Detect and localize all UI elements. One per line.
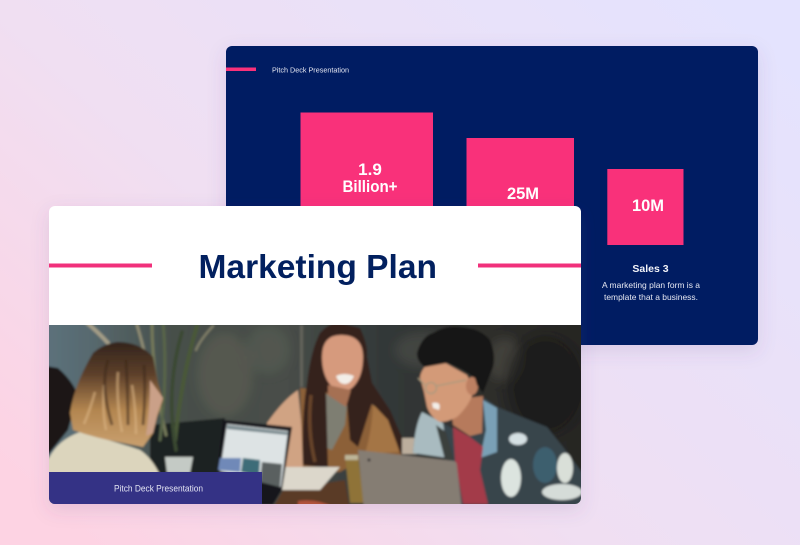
right accent bar [478, 264, 581, 268]
stat block: 10M [607, 169, 684, 245]
woman center: face and neck [322, 335, 363, 392]
glass [165, 457, 193, 473]
back slide accent bar [226, 68, 256, 71]
man: glasses [418, 378, 466, 394]
stat block: 10M: 10M [632, 197, 664, 215]
banner: pitch deck presentation [49, 472, 262, 504]
stat block: 1.9 Billion+: 1.9 [358, 160, 382, 179]
small laptop [217, 420, 292, 505]
back slide label: Pitch Deck Presentation [272, 66, 349, 74]
wall cushion [402, 438, 417, 454]
title: Marketing Plan [198, 248, 437, 285]
beer glass [345, 455, 364, 503]
stat block: 1.9 Billion+: Billion+ [342, 178, 398, 196]
panel: front slide [30, 206, 600, 525]
woman center: sweater [267, 390, 306, 472]
man: hair [417, 327, 494, 393]
vertical post [300, 325, 303, 387]
man: jacket [444, 397, 581, 504]
sales 3 description: A marketing plan form is a [602, 280, 700, 290]
sales 3 description [602, 280, 700, 302]
table [274, 480, 350, 504]
silver laptop [358, 450, 462, 510]
man: neck and face [450, 396, 483, 436]
panel: back slide [226, 46, 758, 345]
photo: three people laughing around laptops [49, 325, 581, 504]
sales 3 heading: Sales 3 [632, 263, 669, 275]
dark plant area [49, 365, 77, 455]
man: red shirt [453, 427, 488, 504]
grass leaves [86, 322, 213, 450]
left accent bar [49, 264, 152, 268]
woman left: sweater [49, 431, 161, 472]
woman left: hair [70, 342, 163, 447]
woman center: hair [302, 323, 403, 468]
stat block: 1.9 Billion+ [300, 112, 433, 222]
banner: pitch deck presentation: Pitch Deck Presentation [114, 484, 203, 494]
stat block: 25M [466, 138, 574, 223]
stat block: 25M: 25M [507, 185, 539, 203]
wall [49, 325, 581, 504]
sales 3 description: template that a business. [604, 292, 698, 302]
notebook [282, 467, 340, 490]
